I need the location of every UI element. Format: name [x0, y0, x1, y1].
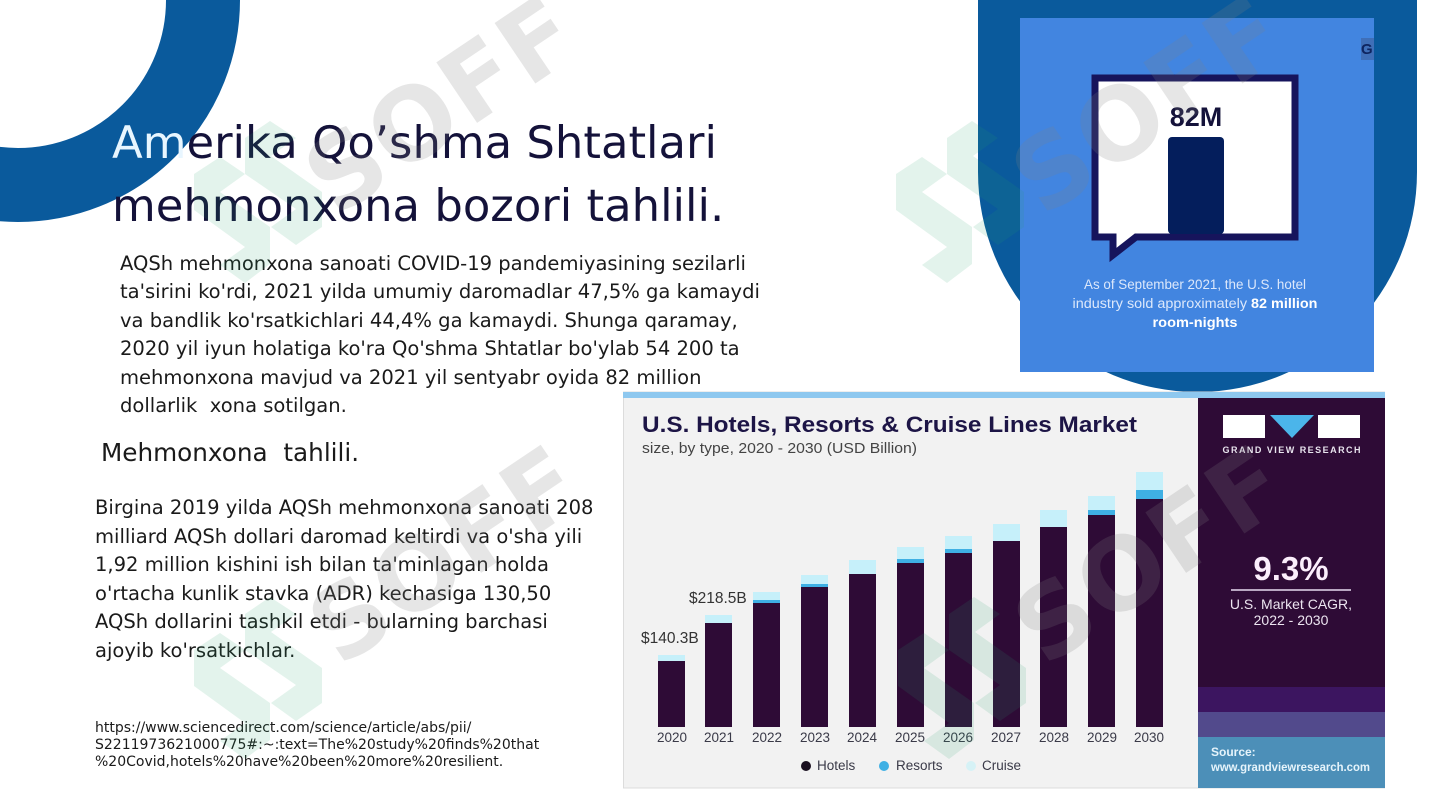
source link: %20Covid,hotels%20have%20been%20more%20resilient. — [95, 754, 503, 770]
analysis paragraph: milliard AQSh dollari daromad keltirdi va o'sha yili — [95, 524, 582, 548]
x axis years — [657, 730, 1164, 745]
source note: Source: — [1211, 745, 1256, 759]
analysis paragraph: AQSh dollarini tashkil etdi - bularning barchasi — [95, 610, 548, 633]
x axis years: 2024 — [847, 730, 878, 745]
title: Amerika Qo’shma Shtatlari — [112, 116, 717, 169]
bar value labels: $218.5B — [689, 590, 747, 607]
legend: Resorts — [896, 758, 943, 773]
intro paragraph — [120, 252, 760, 417]
title — [112, 116, 724, 232]
legend — [801, 758, 1021, 773]
chart subtitle: size, by type, 2020 - 2030 (USD Billion) — [642, 441, 917, 457]
analysis paragraph: ajoyib ko'rsatkichlar. — [95, 638, 295, 662]
title: mehmonxona bozori tahlili. — [112, 179, 724, 232]
x axis years: 2023 — [800, 730, 830, 745]
watermark overlay: SOFF — [288, 422, 604, 688]
x axis years: 2029 — [1087, 730, 1117, 745]
intro paragraph: dollarlik xona sotilgan. — [120, 394, 347, 417]
legend: Hotels — [817, 758, 856, 773]
bar: 82M — [1168, 137, 1224, 234]
analysis paragraph — [95, 496, 593, 662]
speech bubble with bar — [1095, 78, 1295, 255]
card caption: industry sold approximately 82 million — [1072, 296, 1318, 311]
analysis paragraph: o'rtacha kunlik stavka (ADR) kechasiga 130,50 — [95, 582, 551, 604]
x axis years: 2028 — [1039, 730, 1069, 745]
panel: 82M blue card: G — [1361, 41, 1373, 58]
analysis paragraph: 1,92 million kishini ish bilan ta'minlagan holda — [95, 553, 549, 576]
intro paragraph: AQSh mehmonxona sanoati COVID-19 pandemiyasining sezilarli — [120, 252, 746, 275]
CAGR value: 9.3% — [1253, 550, 1329, 587]
chart title: U.S. Hotels, Resorts & Cruise Lines Market — [642, 412, 1138, 437]
logo: Grand View Research — [1222, 415, 1360, 455]
card caption — [1072, 277, 1318, 330]
intro paragraph: va bandlik ko'rsatkichlari 44,4% ga kamaydi. Shunga qaramay, — [120, 309, 738, 332]
CAGR label — [1230, 596, 1352, 628]
x axis years: 2025 — [895, 730, 925, 745]
side panel: CAGR — [1198, 398, 1385, 788]
legend: Cruise — [982, 758, 1021, 773]
intro paragraph: 2020 yil iyun holatiga ko'ra Qo'shma Shtatlar bo'ylab 54 200 ta — [120, 337, 740, 360]
card caption: As of September 2021, the U.S. hotel — [1084, 277, 1306, 292]
x axis years: 2020 — [657, 730, 687, 745]
source link — [95, 720, 539, 770]
x axis years: 2027 — [991, 730, 1021, 745]
bar value labels: $140.3B — [641, 630, 699, 647]
card caption: room-nights — [1152, 315, 1238, 330]
source note — [1210, 745, 1370, 774]
intro paragraph: mehmonxona mavjud va 2021 yil sentyabr oyida 82 million — [120, 366, 702, 389]
bar chart — [658, 472, 1163, 727]
intro paragraph: ta'sirini ko'rdi, 2021 yilda umumiy daromadlar 47,5% ga kamaydi — [120, 280, 760, 303]
logo: Grand View Research: GRAND VIEW RESEARCH — [1222, 445, 1360, 455]
section heading: Mehmonxona tahlili. — [101, 438, 359, 467]
bar value labels — [641, 590, 747, 647]
source note: www.grandviewresearch.com — [1210, 760, 1370, 774]
x axis years: 2030 — [1134, 730, 1164, 745]
x axis years: 2021 — [704, 730, 734, 745]
source link: https://www.sciencedirect.com/science/article/abs/pii/ — [95, 720, 471, 736]
watermark overlay: SOFF — [993, 422, 1309, 688]
x axis years: 2022 — [752, 730, 782, 745]
CAGR label: 2022 - 2030 — [1254, 612, 1329, 628]
x axis years: 2026 — [943, 730, 973, 745]
value label: 82M — [1170, 102, 1222, 132]
analysis paragraph: Birgina 2019 yilda AQSh mehmonxona sanoati 208 — [95, 496, 593, 519]
CAGR label: U.S. Market CAGR, — [1230, 596, 1352, 612]
source link: S2211973621000775#:~:text=The%20study%20finds%20that — [95, 737, 539, 753]
